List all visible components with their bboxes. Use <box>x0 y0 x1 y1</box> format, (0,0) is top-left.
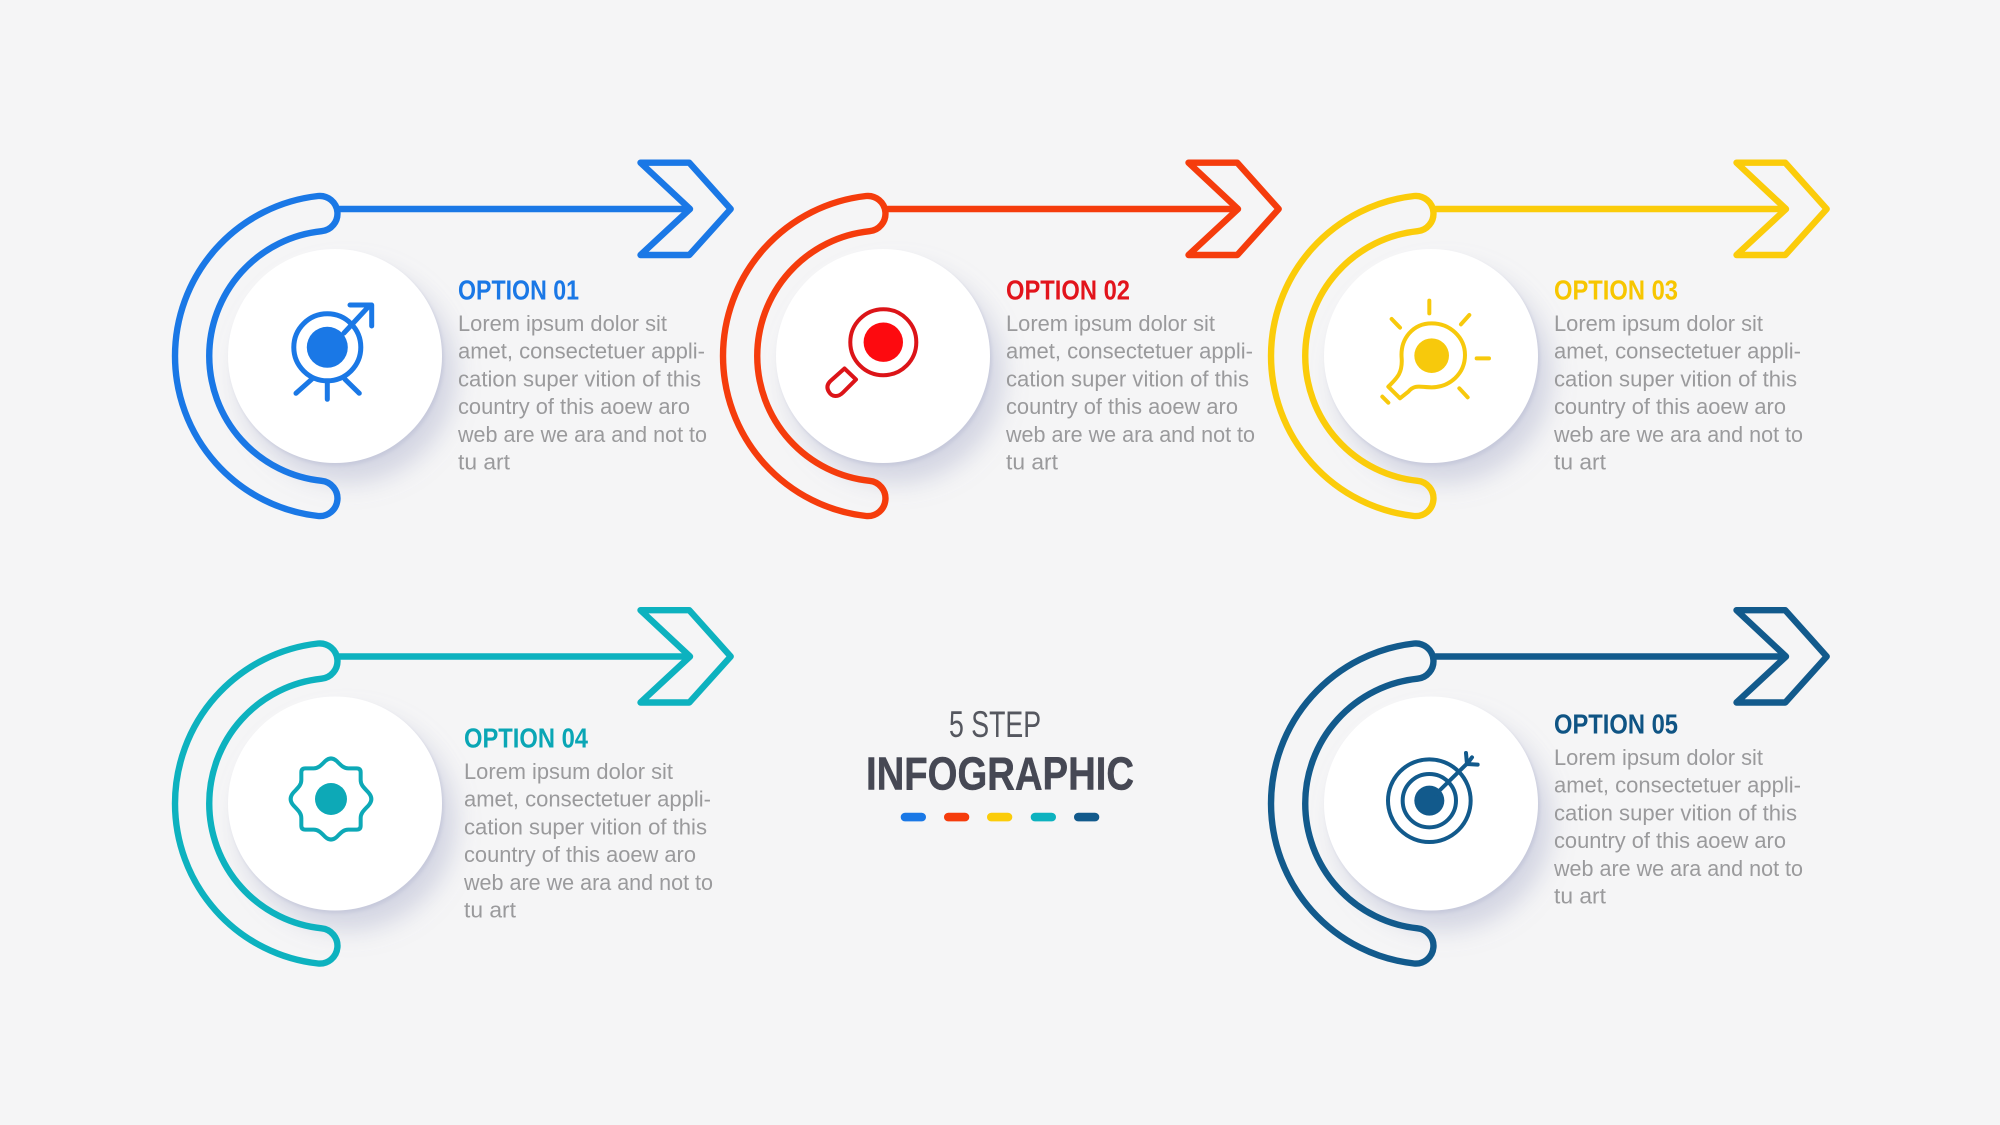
text block: option 01: country of this aoew aro <box>458 394 690 419</box>
text block: option 01: Lorem ipsum dolor sit <box>458 311 667 336</box>
arc and arrow: option 04 <box>175 610 731 964</box>
white circle: option 03 <box>1324 249 1538 463</box>
arc and arrow: option 02 <box>723 163 1279 516</box>
text block: option 02: tu art <box>1006 450 1058 474</box>
heading: option 02: OPTION 02 <box>1006 274 1130 306</box>
white circle: option 04 <box>228 696 442 910</box>
text block: option 02: web are we ara and not to <box>1005 422 1255 447</box>
panel: option 02 <box>723 163 1279 516</box>
text block: option 04 <box>463 759 713 922</box>
text block: option 04: country of this aoew aro <box>464 842 696 867</box>
panel: option 01 <box>175 163 731 516</box>
white circle: option 02 <box>776 249 990 463</box>
text block: option 04: web are we ara and not to <box>463 870 713 895</box>
text block: option 03: tu art <box>1554 450 1606 474</box>
text block: option 03: Lorem ipsum dolor sit <box>1554 311 1763 336</box>
text block: option 05: amet, consectetuer appli- <box>1554 773 1801 798</box>
white circle: option 05 <box>1324 696 1538 910</box>
text block: option 04: cation super vition of this <box>464 814 707 839</box>
arc and arrow: option 05 <box>1271 610 1827 964</box>
heading: option 04: OPTION 04 <box>464 722 588 754</box>
text block: option 01: cation super vition of this <box>458 366 701 391</box>
text block: option 04: tu art <box>464 898 516 922</box>
text block: option 03: web are we ara and not to <box>1553 422 1803 447</box>
text block: option 05: web are we ara and not to <box>1553 856 1803 881</box>
text block: option 04: Lorem ipsum dolor sit <box>464 759 673 784</box>
icon: magnifier <box>827 309 916 396</box>
white circle: option 01 <box>228 249 442 463</box>
heading: option 05: OPTION 05 <box>1554 708 1678 740</box>
text block: option 03 <box>1553 311 1803 474</box>
text block: option 04: amet, consectetuer appli- <box>464 787 711 812</box>
text block: option 01: tu art <box>458 450 510 474</box>
text block: option 05: Lorem ipsum dolor sit <box>1554 745 1763 770</box>
text block: option 03: amet, consectetuer appli- <box>1554 339 1801 364</box>
icon: light bulb <box>1382 301 1489 403</box>
text block: option 05: tu art <box>1554 884 1606 908</box>
panel: option 05 <box>1271 610 1827 964</box>
subtitle: 5 step: 5 STEP <box>949 704 1041 745</box>
text block: option 02 <box>1005 311 1255 474</box>
panel: option 04 <box>175 610 731 964</box>
text block: option 01 <box>457 311 707 474</box>
heading: option 03: OPTION 03 <box>1554 274 1678 306</box>
icon: target with arrow <box>1388 753 1478 842</box>
text block: option 02: amet, consectetuer appli- <box>1006 339 1253 364</box>
text block: option 01: amet, consectetuer appli- <box>458 339 705 364</box>
icon: male symbol target <box>294 305 372 399</box>
icon: gear <box>291 758 371 839</box>
arc and arrow: option 03 <box>1271 163 1827 516</box>
text block: option 03: cation super vition of this <box>1554 366 1797 391</box>
text block: option 02: cation super vition of this <box>1006 366 1249 391</box>
heading: infographic: INFOGRAPHIC <box>866 748 1134 800</box>
text block: option 05: country of this aoew aro <box>1554 828 1786 853</box>
text block: option 02: country of this aoew aro <box>1006 394 1238 419</box>
heading: option 01: OPTION 01 <box>458 274 579 306</box>
legend color pills <box>901 813 1099 821</box>
text block: option 02: Lorem ipsum dolor sit <box>1006 311 1215 336</box>
text block: option 05 <box>1553 745 1803 908</box>
text block: option 05: cation super vition of this <box>1554 800 1797 825</box>
text block: option 03: country of this aoew aro <box>1554 394 1786 419</box>
text block: option 01: web are we ara and not to <box>457 422 707 447</box>
title <box>866 704 1134 821</box>
arc and arrow: option 01 <box>175 163 731 516</box>
panel: option 03 <box>1271 163 1827 516</box>
